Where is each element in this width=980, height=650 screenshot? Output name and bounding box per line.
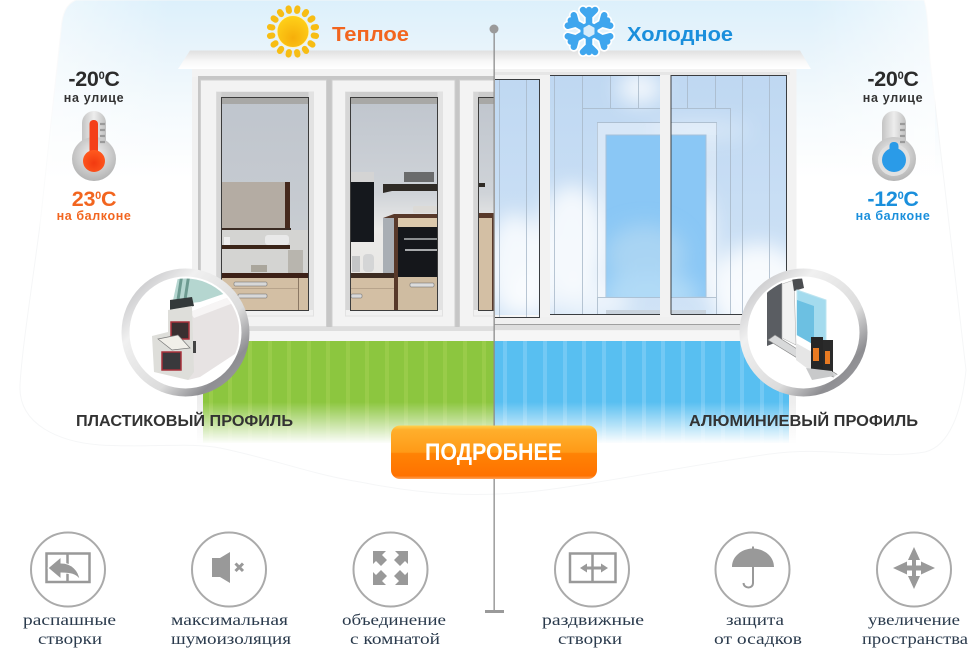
feature: swing sashes: [23, 532, 116, 648]
balcony temperature, warm side: 23: [72, 187, 95, 211]
icon: snowflake: [568, 10, 610, 52]
icon: cold thermometer: [872, 111, 916, 181]
sky through cold glazing: [495, 76, 786, 317]
outdoor temperature, warm side: C: [104, 67, 120, 91]
feature: room merge: объединение: [342, 612, 446, 629]
icon: warm thermometer: [72, 111, 116, 181]
balcony temperature, cold side: 0: [898, 190, 904, 202]
outdoor caption, warm side: на улице: [64, 91, 124, 105]
aluminium profile badge: [740, 268, 868, 396]
plastic profile badge: [122, 268, 250, 396]
balcony temperature, warm side: 0: [95, 190, 101, 202]
icon: sun: [266, 5, 320, 58]
feature: noise insulation: максимальная: [171, 612, 289, 629]
balcony caption, warm side: на балконе: [57, 209, 131, 223]
feature: weather protection: от осадков: [714, 631, 803, 648]
feature: noise insulation: шумоизоляция: [171, 631, 292, 648]
left temperature block: [57, 67, 131, 223]
kitchen reflection, right pane: [478, 97, 494, 310]
feature: more space: пространства: [862, 631, 968, 648]
right temperature block: [856, 67, 930, 223]
outdoor caption, cold side: на улице: [863, 91, 923, 105]
aluminium profile label: АЛЮМИНИЕВЫЙ ПРОФИЛЬ: [689, 411, 918, 430]
divider line: [485, 24, 504, 613]
feature: swing sashes: распашные: [23, 612, 116, 629]
balcony temperature, cold side: -12: [867, 187, 898, 211]
outdoor temperature, warm side: 0: [99, 70, 105, 82]
warm side frame: [192, 69, 494, 341]
outdoor temperature, warm side: -20: [68, 67, 99, 91]
blue siding: [494, 341, 796, 443]
button: details: [391, 426, 597, 479]
outdoor temperature, cold side: C: [903, 67, 919, 91]
balcony illustration: [178, 50, 811, 444]
roof: [178, 50, 811, 69]
feature: room merge: [342, 532, 446, 648]
feature: weather protection: защита: [726, 612, 784, 629]
balcony temperature, warm side: C: [101, 187, 116, 211]
feature: swing sashes: створки: [38, 631, 103, 648]
cold pane outlines: [495, 76, 786, 318]
heading: warm: Теплое: [332, 24, 409, 46]
feature: weather protection: [714, 532, 803, 648]
outdoor temperature, cold side: 0: [898, 70, 904, 82]
kitchen reflection, middle pane: [350, 97, 438, 310]
feature: sliding sashes: раздвижные: [542, 612, 644, 629]
pane outlines: [222, 98, 494, 310]
heading: cold: Холодное: [627, 24, 733, 46]
plastic profile label: ПЛАСТИКОВЫЙ ПРОФИЛЬ: [76, 411, 293, 430]
feature: sliding sashes: створки: [558, 631, 623, 648]
kitchen reflection, left pane: [221, 97, 309, 310]
feature: more space: увеличение: [868, 612, 960, 629]
feature: more space: [862, 532, 968, 648]
balcony temperature, cold side: C: [903, 187, 919, 211]
feature: room merge: с комнатой: [350, 631, 441, 648]
cold side frame: [494, 69, 796, 341]
green siding: [197, 341, 494, 443]
balcony caption, cold side: на балконе: [856, 209, 930, 223]
button: details: ПОДРОБНЕЕ: [425, 439, 562, 466]
feature: noise insulation: [171, 532, 292, 648]
feature: sliding sashes: [542, 532, 644, 648]
outdoor temperature, cold side: -20: [867, 67, 898, 91]
background sky shape: [20, 0, 966, 495]
